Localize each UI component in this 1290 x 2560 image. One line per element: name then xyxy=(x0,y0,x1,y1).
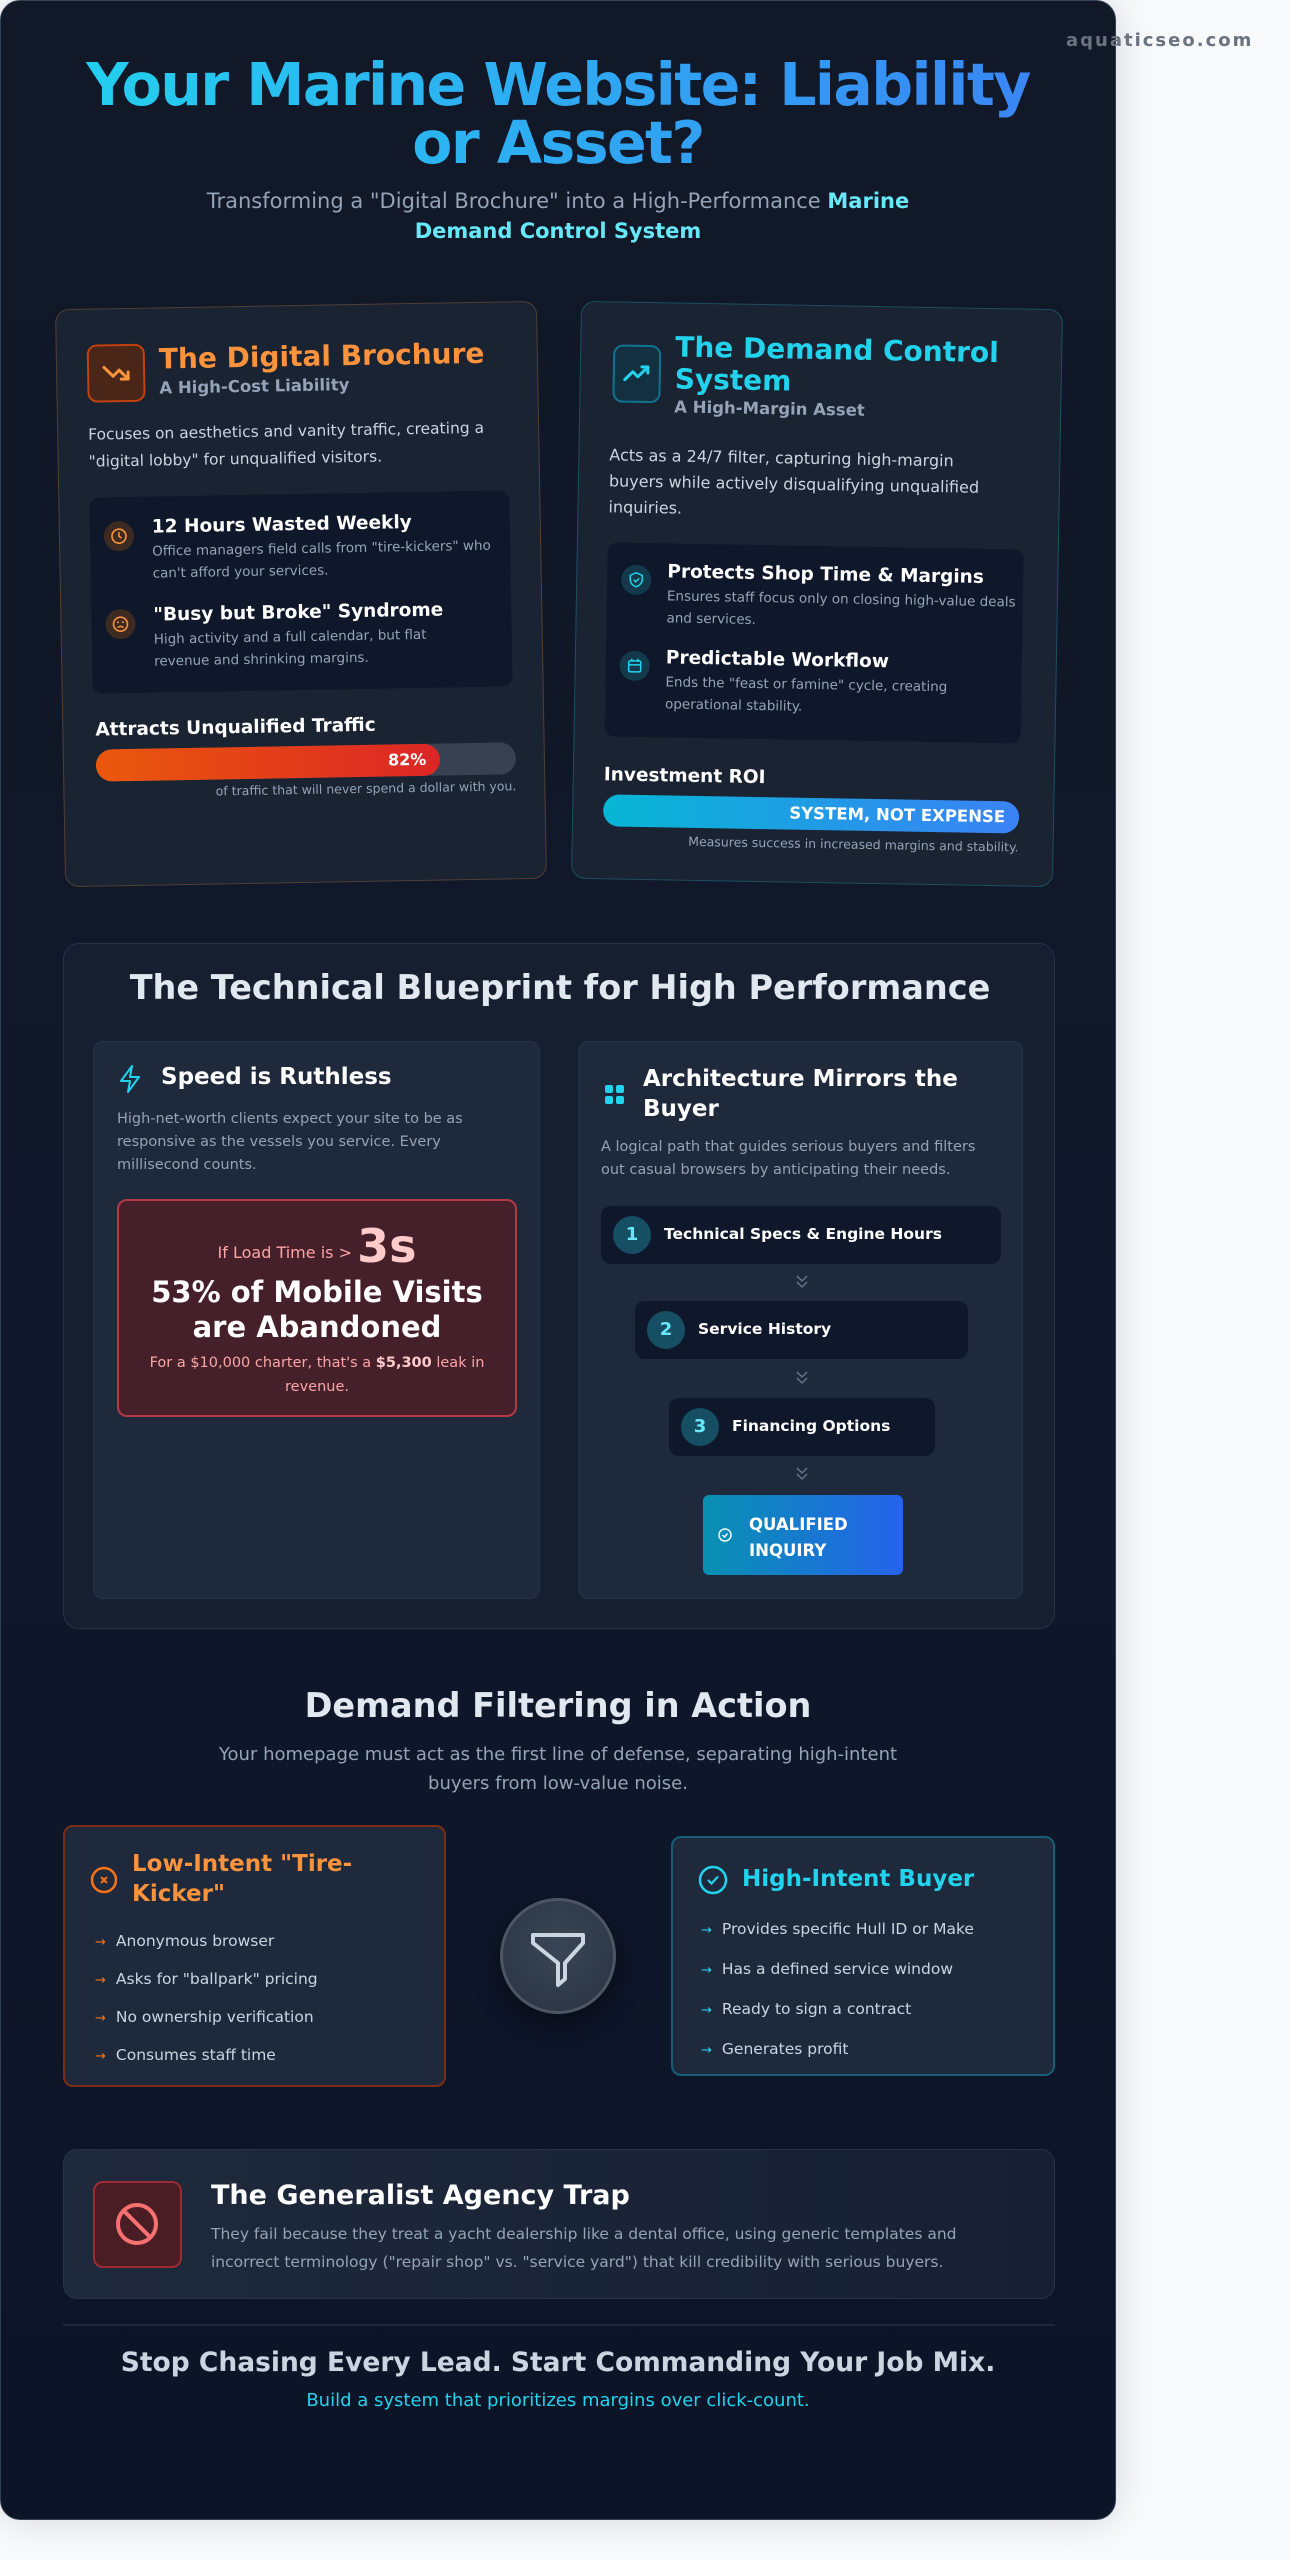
item: busy but broke: "Busy but Broke" Syndrome xyxy=(153,600,443,626)
bar: unqualified traffic: 82% xyxy=(388,750,426,770)
heading: demand filtering: Demand Filtering in Action xyxy=(305,1686,811,1725)
title xyxy=(30,56,1086,172)
icon: check circle xyxy=(698,1866,728,1894)
bar: unqualified traffic: of traffic that will never spend a dollar with you. xyxy=(216,778,517,799)
step 1: Technical Specs & Engine Hours xyxy=(664,1225,942,1243)
bar: unqualified traffic: Attracts Unqualified Traffic xyxy=(95,715,376,741)
callout: load time: are Abandoned xyxy=(193,1310,441,1344)
panel: technical blueprint xyxy=(63,943,1055,1629)
heading: High-Intent Buyer xyxy=(742,1866,974,1892)
item: hours: 12 Hours Wasted Weekly xyxy=(152,512,412,538)
arrow xyxy=(796,1372,808,1384)
list: → Consumes staff time xyxy=(95,2046,276,2064)
description: High-net-worth clients expect your site to be as responsive as the vessels you service. Every millisecond counts. xyxy=(117,1111,463,1173)
step 2 xyxy=(635,1301,968,1359)
item: protects: Ensures staff focus only on closing high-value deals and services. xyxy=(666,588,1016,628)
step 2: 2 xyxy=(660,1319,672,1340)
panel: generalist agency trap xyxy=(63,2149,1055,2299)
heading: The Demand Control System xyxy=(674,330,999,398)
panel: high intent xyxy=(671,1836,1055,2076)
arrow xyxy=(796,1276,808,1288)
step 3: 3 xyxy=(694,1416,706,1437)
description: Focuses on aesthetics and vanity traffic, creating a "digital lobby" for unqualified visitors. xyxy=(88,419,484,471)
step 3 xyxy=(669,1398,935,1456)
heading: Speed is Ruthless xyxy=(161,1064,392,1090)
sub-panel: speed xyxy=(93,1041,540,1599)
watermark: aquaticseo.com xyxy=(1066,30,1253,51)
title: Your Marine Website: Liability xyxy=(86,51,1030,119)
icon: trending down xyxy=(87,344,146,403)
description: A logical path that guides serious buyers and filters out casual browsers by anticipating their needs. xyxy=(601,1139,975,1178)
heading: A High-Margin Asset xyxy=(674,397,865,420)
list xyxy=(95,1932,318,2064)
description: They fail because they treat a yacht dealership like a dental office, using generic templates and incorrect terminology ("repair shop" vs. "service yard") that kill credibility with serious buyers. xyxy=(211,2225,956,2271)
list: → Anonymous browser xyxy=(95,1932,274,1950)
item: predictable: Ends the "feast or famine" cycle, creating operational stability. xyxy=(665,674,947,715)
footer subline: Build a system that prioritizes margins over click-count. xyxy=(306,2390,810,2411)
inner list xyxy=(89,490,513,694)
description: Acts as a 24/7 filter, capturing high-margin buyers while actively disqualifying unqualified inquiries. xyxy=(608,445,979,518)
bar: unqualified traffic xyxy=(95,715,517,799)
item: predictable: Predictable Workflow xyxy=(666,647,889,672)
step 1: 1 xyxy=(626,1224,638,1245)
arrow xyxy=(796,1468,808,1480)
list: → No ownership verification xyxy=(95,2008,314,2026)
list: → Generates profit xyxy=(701,2040,848,2058)
subtitle: Transforming a "Digital Brochure" into a High-Performance Marine Demand Control System xyxy=(207,189,909,243)
icon: funnel xyxy=(500,1898,616,2014)
list: → Provides specific Hull ID or Make xyxy=(701,1920,974,1938)
icon: x circle xyxy=(90,1866,118,1894)
callout: load time: If Load Time is > 3s xyxy=(218,1219,416,1273)
title: or Asset? xyxy=(412,109,704,177)
step 1 xyxy=(601,1206,1001,1264)
heading: The Generalist Agency Trap xyxy=(211,2180,630,2211)
heading: The Technical Blueprint for High Performance xyxy=(130,968,990,1007)
callout: load time: For a $10,000 charter, that's a $5,300 leak in revenue. xyxy=(150,1355,484,1395)
step 2: Service History xyxy=(698,1320,831,1338)
item: protects: Protects Shop Time & Margins xyxy=(667,561,984,588)
icon: grid xyxy=(605,1085,624,1104)
qualified inquiry: INQUIRY xyxy=(749,1541,826,1560)
item: predictable xyxy=(620,647,947,715)
inner list xyxy=(604,542,1024,744)
icon: trending up xyxy=(612,344,661,403)
item: hours xyxy=(104,512,491,582)
heading: A High-Cost Liability xyxy=(159,375,350,397)
item: busy but broke xyxy=(106,600,443,670)
list xyxy=(701,1920,974,2058)
icon: prohibited xyxy=(93,2181,182,2268)
bar: investment ROI xyxy=(603,764,1020,855)
panel: demand control system xyxy=(571,301,1063,887)
heading xyxy=(158,337,485,397)
panel: digital brochure xyxy=(55,301,547,887)
icon: bolt xyxy=(120,1065,140,1093)
list: → Ready to sign a contract xyxy=(701,2000,911,2018)
sub-panel: architecture xyxy=(578,1041,1023,1599)
item: busy but broke: High activity and a full calendar, but flat revenue and shrinking margins. xyxy=(154,627,427,670)
item: hours: Office managers field calls from "tire-kickers" who can't afford your services. xyxy=(152,538,491,582)
panel: low intent xyxy=(63,1825,446,2087)
list: → Has a defined service window xyxy=(701,1960,953,1978)
bar: investment ROI: Measures success in increased margins and stability. xyxy=(688,834,1019,855)
callout: load time xyxy=(117,1199,517,1417)
bar: investment ROI: SYSTEM, NOT EXPENSE xyxy=(789,804,1005,826)
footer headline: Stop Chasing Every Lead. Start Commanding Your Job Mix. xyxy=(121,2347,995,2378)
subtitle: demand filtering: Your homepage must act as the first line of defense, separating high-intent buyers from low-value noise. xyxy=(219,1744,897,1794)
qualified inquiry: QUALIFIED xyxy=(749,1515,848,1534)
callout: load time: 53% of Mobile Visits xyxy=(151,1275,483,1309)
step 3: Financing Options xyxy=(732,1417,890,1435)
heading: Architecture Mirrors the Buyer xyxy=(643,1066,958,1122)
list: → Asks for "ballpark" pricing xyxy=(95,1970,318,1988)
item: protects xyxy=(621,561,1016,628)
heading: Low-Intent "Tire-Kicker" xyxy=(132,1851,352,1907)
bar: investment ROI: Investment ROI xyxy=(604,764,766,788)
qualified inquiry xyxy=(703,1495,903,1575)
heading: The Digital Brochure xyxy=(159,337,485,375)
